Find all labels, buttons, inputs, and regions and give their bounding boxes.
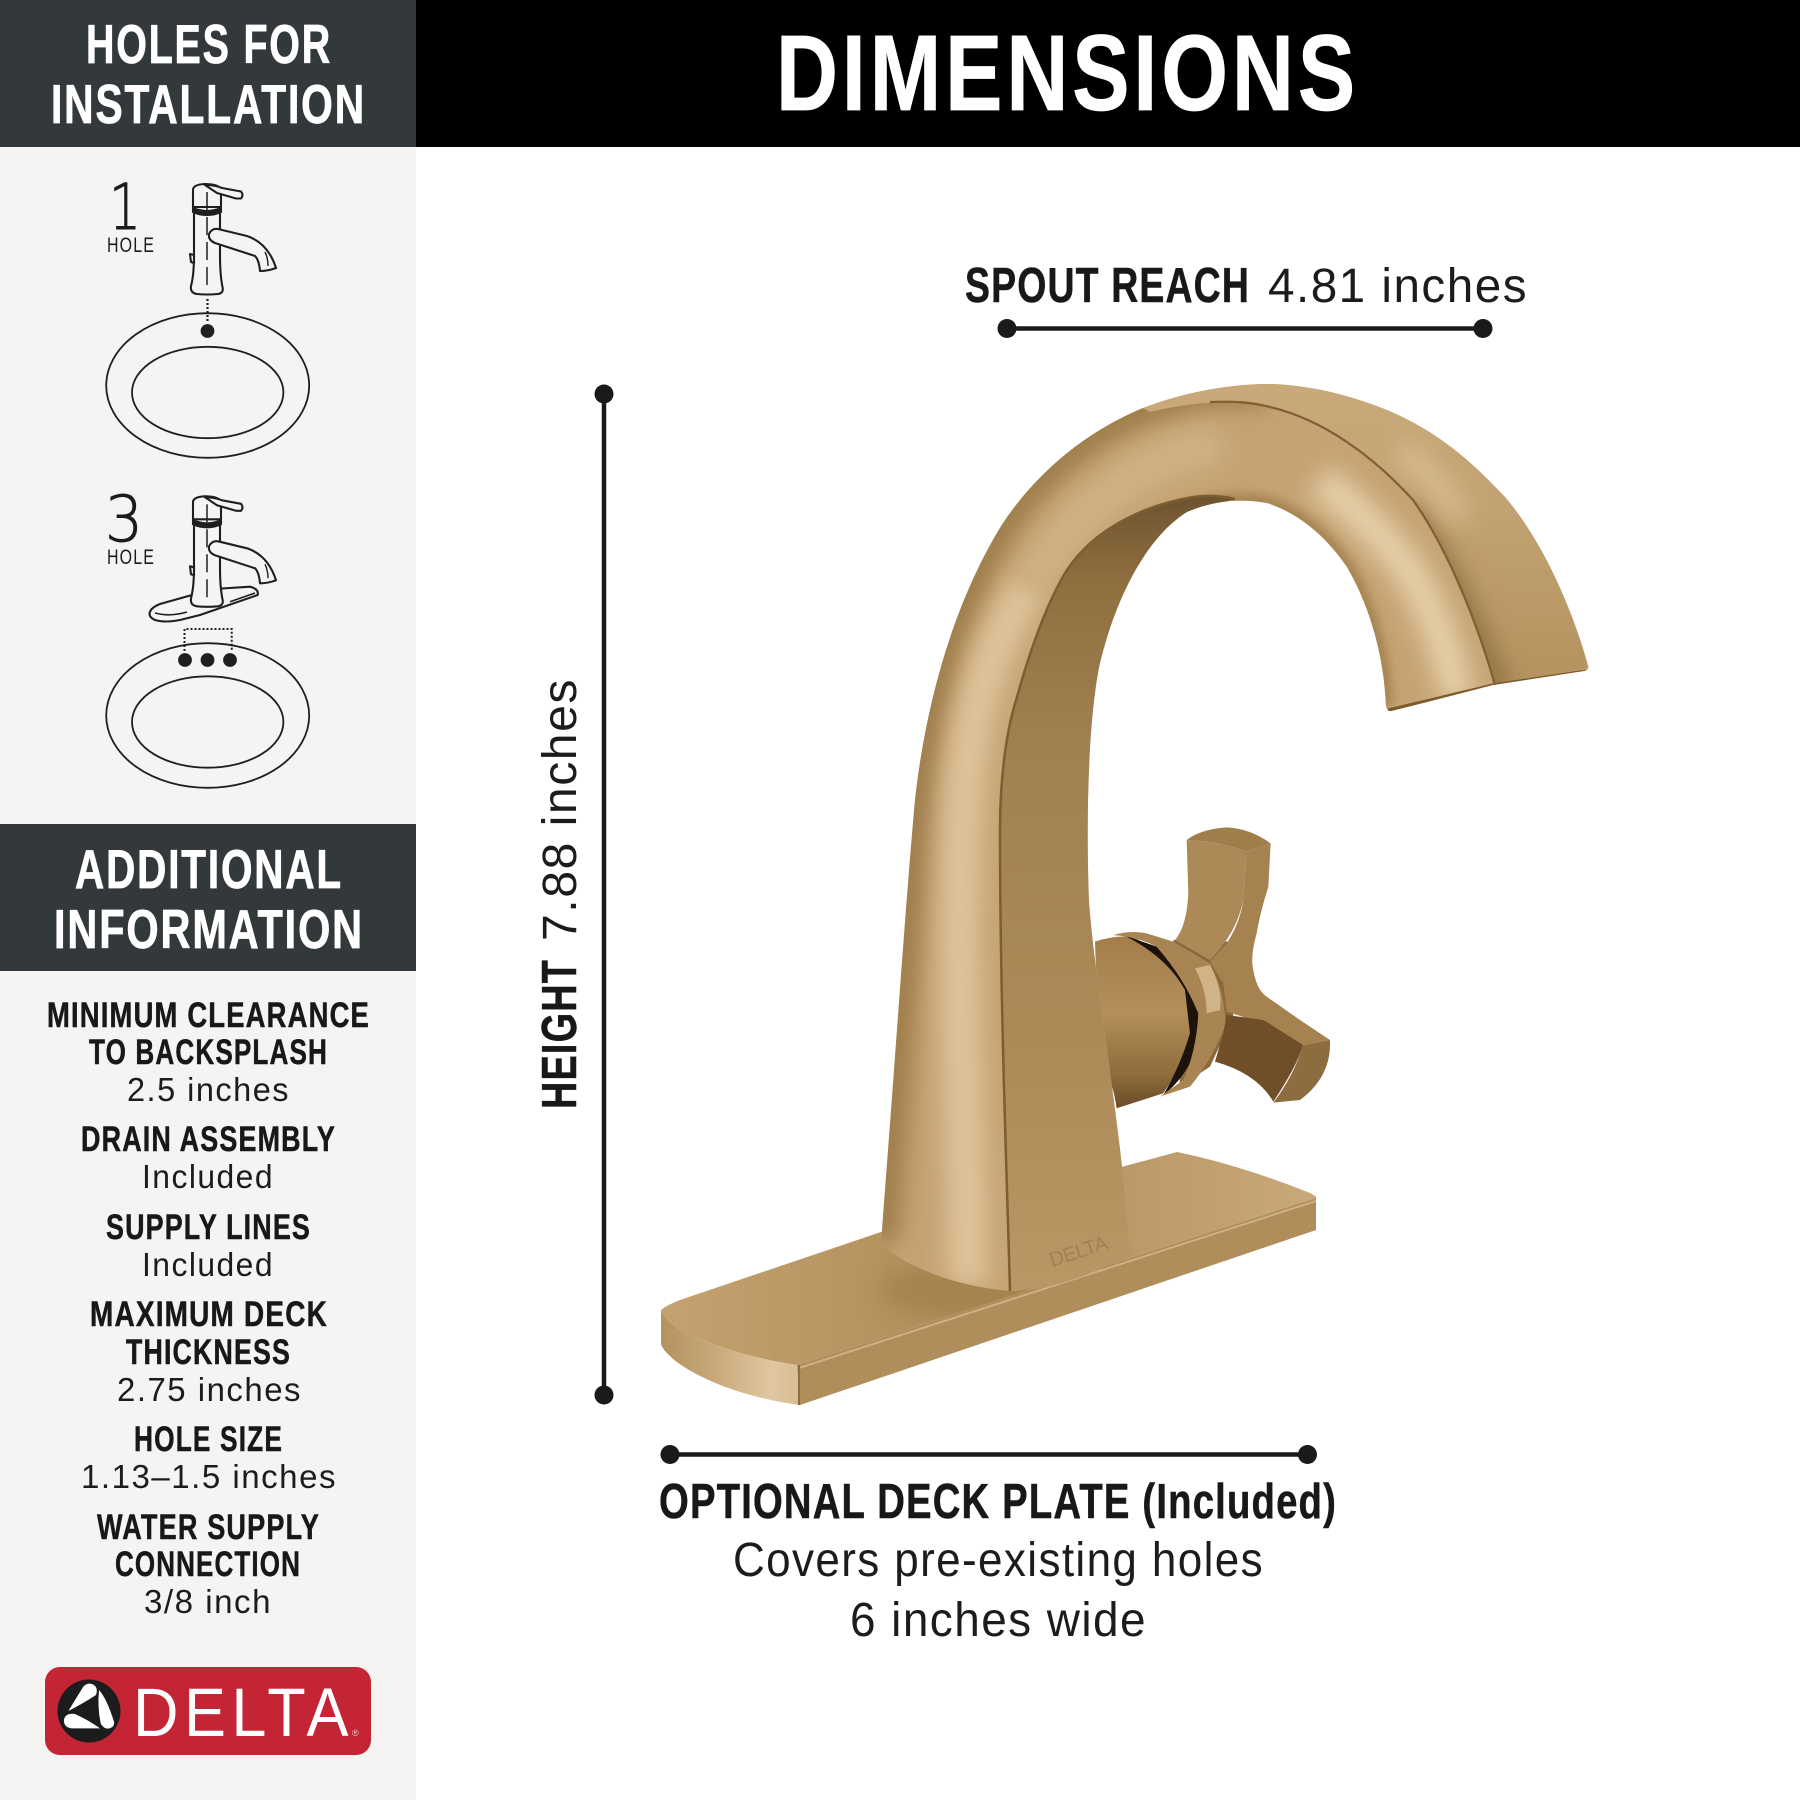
deck plate — [661, 1152, 1316, 1405]
text block: additional information list: Included — [142, 1158, 274, 1195]
handle — [1095, 827, 1330, 1108]
text block: additional information list: MINIMUM CLEARANCE — [47, 996, 370, 1035]
shading: arch highlight — [1030, 445, 1220, 585]
shading: outer edge — [881, 388, 1270, 1243]
label: 3 hole — [105, 483, 155, 569]
text block: additional information list: 1.13–1.5 inches — [81, 1458, 337, 1495]
logo: Delta — [45, 1667, 371, 1755]
label: 3 hole: HOLE — [107, 546, 155, 569]
logo: Delta: ® — [352, 1728, 359, 1738]
text block: additional information list: DRAIN ASSEMBLY — [81, 1120, 336, 1159]
icon: deck plate sketch — [150, 587, 258, 622]
dimension: height: HEIGHT — [533, 959, 587, 1109]
dimension: height: 7.88 inches — [534, 678, 587, 941]
icon: sink one hole — [106, 313, 309, 458]
leader: dotted bracket — [184, 629, 232, 651]
logo: Delta: DELTA — [133, 1674, 354, 1751]
heading band: additional information — [0, 824, 416, 971]
label: 1 hole: 1 — [109, 171, 141, 244]
dimension: optional deck plate: 6 inches wide — [850, 1594, 1147, 1647]
text block: additional information list: THICKNESS — [126, 1333, 291, 1372]
text block: additional information list: WATER SUPPLY — [97, 1508, 320, 1547]
spout outer panel — [1143, 384, 1588, 685]
panel: sidebar — [0, 0, 416, 1800]
faucet body and spout — [881, 384, 1588, 1291]
dimension: optional deck plate: Covers pre-existing holes — [733, 1534, 1264, 1587]
dimension: optional deck plate: OPTIONAL DECK PLATE (Included) — [659, 1475, 1337, 1529]
text block: additional information list: Included — [142, 1246, 274, 1283]
heading band: additional information: ADDITIONAL — [75, 838, 343, 900]
column face — [1000, 496, 1235, 1291]
image: faucet illustration — [661, 384, 1588, 1405]
label: 3 hole: 3 — [105, 483, 143, 556]
deck plate etched logo: DELTA — [1047, 1232, 1111, 1272]
heading band: holes for installation: INSTALLATION — [51, 73, 366, 135]
text block: additional information list: MAXIMUM DECK — [90, 1295, 328, 1334]
leader: dotted line — [206, 299, 209, 323]
text block: additional information list: TO BACKSPLASH — [89, 1033, 328, 1072]
text block: additional information list: 2.75 inches — [117, 1371, 302, 1408]
text block: additional information list: CONNECTION — [115, 1545, 301, 1584]
dimension: spout reach: SPOUT REACH — [965, 259, 1250, 313]
dimension: spout reach — [965, 259, 1528, 338]
heading band: holes for installation — [0, 0, 416, 147]
text block: additional information list — [47, 996, 370, 1620]
shading: face highlight — [960, 585, 1030, 1285]
heading band: holes for installation: HOLES FOR — [86, 13, 332, 75]
icon: sink three holes — [106, 643, 309, 788]
label: 1 hole: HOLE — [107, 234, 155, 257]
text block: additional information list: HOLE SIZE — [134, 1420, 283, 1459]
heading band: dimensions — [416, 0, 1800, 147]
icon: faucet sketch one — [190, 184, 276, 294]
diagram: 1 hole — [106, 171, 309, 458]
text block: additional information list: 3/8 inch — [144, 1583, 272, 1620]
heading band: additional information: INFORMATION — [54, 898, 364, 960]
shading: spout highlight — [1320, 480, 1458, 700]
dimension: spout reach: 4.81 inches — [1268, 260, 1528, 313]
icon: faucet sketch three — [190, 496, 276, 607]
text block: additional information list: 2.5 inches — [127, 1071, 290, 1108]
dimension: optional deck plate — [659, 1445, 1337, 1647]
diagram: 3 hole — [105, 483, 309, 788]
text block: additional information list: SUPPLY LINES — [106, 1208, 311, 1247]
dimension: height — [533, 384, 614, 1404]
heading band: dimensions: DIMENSIONS — [776, 12, 1359, 133]
